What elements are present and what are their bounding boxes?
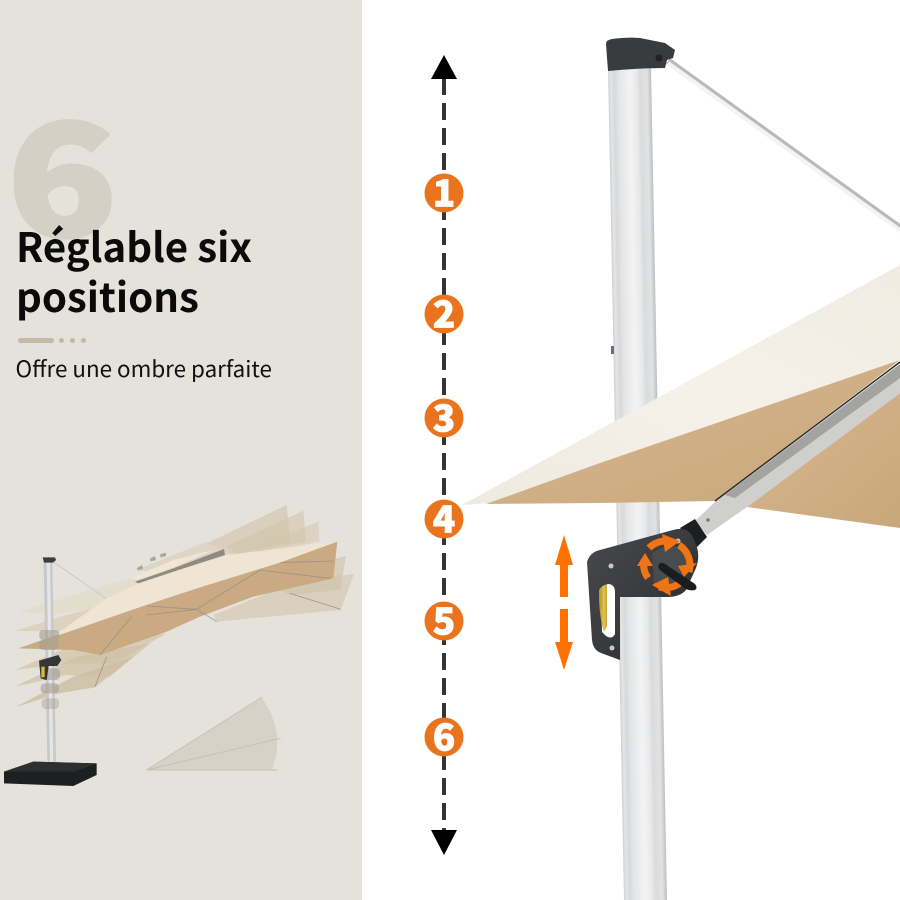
illustration: large umbrella close-up [462, 38, 900, 900]
bracket neck [680, 519, 707, 547]
ghost canopy layers [15, 505, 354, 707]
marker 1: 1 [433, 164, 455, 218]
marker 5: 5 [433, 592, 455, 646]
pole cap [606, 38, 675, 71]
divider bar and dots [18, 338, 86, 343]
tilt bracket assembly [587, 519, 707, 660]
canopy top [462, 265, 900, 505]
canopy ribs [95, 561, 341, 687]
marker 6 [424, 708, 464, 762]
main canopy underside [18, 542, 337, 655]
position markers 1 to 6 [424, 164, 464, 762]
marker 2: 2 [433, 284, 455, 338]
gold inlay [599, 585, 607, 632]
bracket body [587, 529, 698, 660]
canopy underside far panel [747, 393, 900, 528]
rotation hub [652, 543, 688, 594]
illustration: small umbrella with six tilt positions [4, 505, 354, 786]
arrowhead: up [431, 55, 457, 79]
heading [16, 215, 252, 324]
marker 2 [424, 284, 464, 338]
tilt angle sector [147, 697, 281, 770]
marker 4: 4 [433, 490, 455, 544]
pole [608, 68, 667, 900]
heading: positions [16, 265, 199, 324]
tilt bracket [39, 655, 61, 680]
marker 5 [424, 592, 464, 646]
canopy vent [130, 549, 225, 583]
marker 1 [424, 164, 464, 218]
marker 4 [424, 490, 464, 544]
marker 3 [424, 388, 464, 442]
vertical dashed height line [442, 78, 446, 830]
orange double arrow [555, 535, 573, 670]
rotation arrows [644, 541, 690, 588]
support cable [53, 562, 107, 599]
pole cap [43, 557, 56, 563]
bracket screws [608, 538, 680, 650]
handle slot [601, 584, 615, 638]
marker 6: 6 [433, 708, 455, 762]
subheading: Offre une ombre parfaite [16, 352, 272, 384]
arrowhead: down [431, 830, 457, 855]
marker 3: 3 [433, 388, 455, 442]
pole [44, 562, 56, 762]
base [4, 762, 97, 786]
canopy rib [695, 362, 900, 535]
support cable [668, 61, 900, 233]
ghost brackets [39, 630, 60, 709]
main canopy top [57, 542, 337, 635]
adjustment lever [658, 563, 696, 590]
heading: Réglable six [16, 215, 252, 274]
panel: left beige background [0, 0, 362, 900]
canopy underside near panel [486, 360, 900, 504]
pole bolt [611, 346, 614, 354]
big number 6 watermark: 6 [7, 55, 117, 281]
